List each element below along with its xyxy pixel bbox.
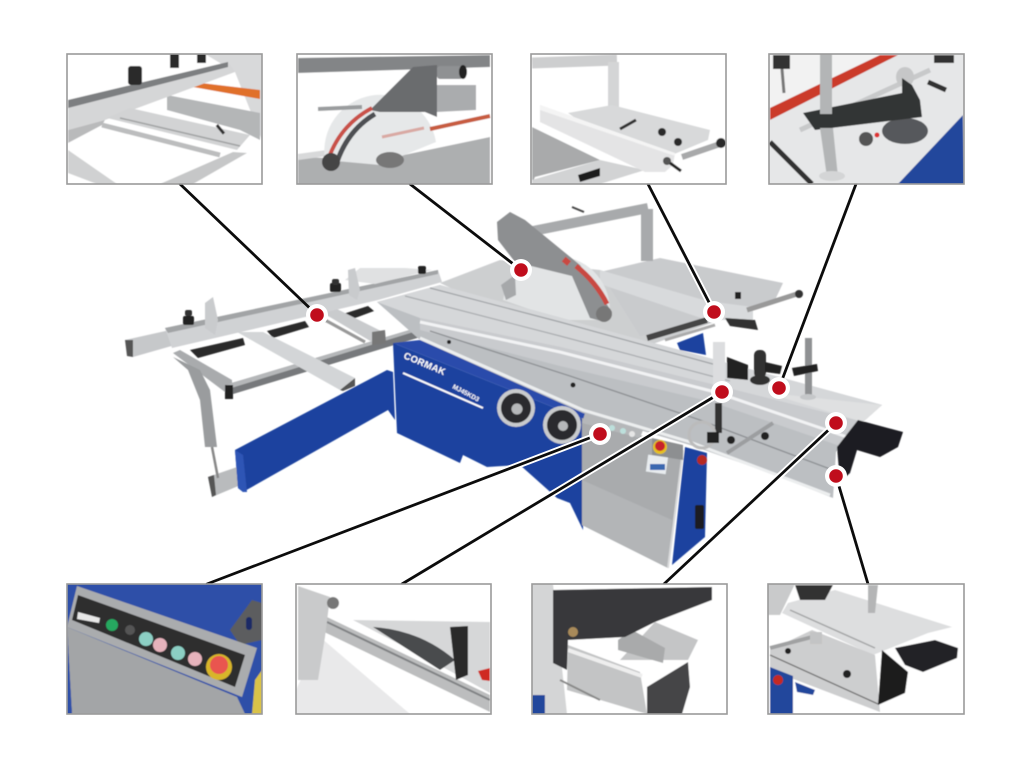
outrigger frame xyxy=(173,306,442,399)
panel: saw guard detail xyxy=(297,54,492,184)
sliding table xyxy=(377,285,882,498)
callout markers xyxy=(306,259,847,487)
panel: sliding table end detail xyxy=(768,584,964,714)
machine: panel saw xyxy=(125,207,903,568)
panel: hold-down clamp detail xyxy=(769,54,964,184)
saw guard arm xyxy=(497,212,612,322)
panel: mitre gauge detail xyxy=(296,584,491,714)
model text: MJ45KD3 xyxy=(451,384,481,404)
brand text: CORMAK xyxy=(402,351,447,378)
mitre fence bar xyxy=(125,266,442,357)
leader lines xyxy=(180,184,868,584)
overhead guard pipe xyxy=(533,207,653,261)
panel: crosscut fence detail xyxy=(531,54,726,184)
saw blade cover xyxy=(503,256,610,320)
cabinet blue rear xyxy=(672,447,707,565)
panel: control panel detail xyxy=(67,584,262,714)
saw table xyxy=(440,260,720,345)
hold-down clamps xyxy=(689,338,818,453)
blue machine body xyxy=(393,340,605,530)
support leg xyxy=(173,357,218,478)
blue support arm xyxy=(208,370,395,497)
panel: table end guard detail xyxy=(532,584,727,714)
handwheels xyxy=(497,389,581,444)
cabinet xyxy=(582,418,707,568)
control strip xyxy=(582,413,643,438)
table end handle xyxy=(837,420,903,482)
crosscut fence and table xyxy=(600,258,803,355)
panel: outrigger table detail xyxy=(67,54,262,184)
